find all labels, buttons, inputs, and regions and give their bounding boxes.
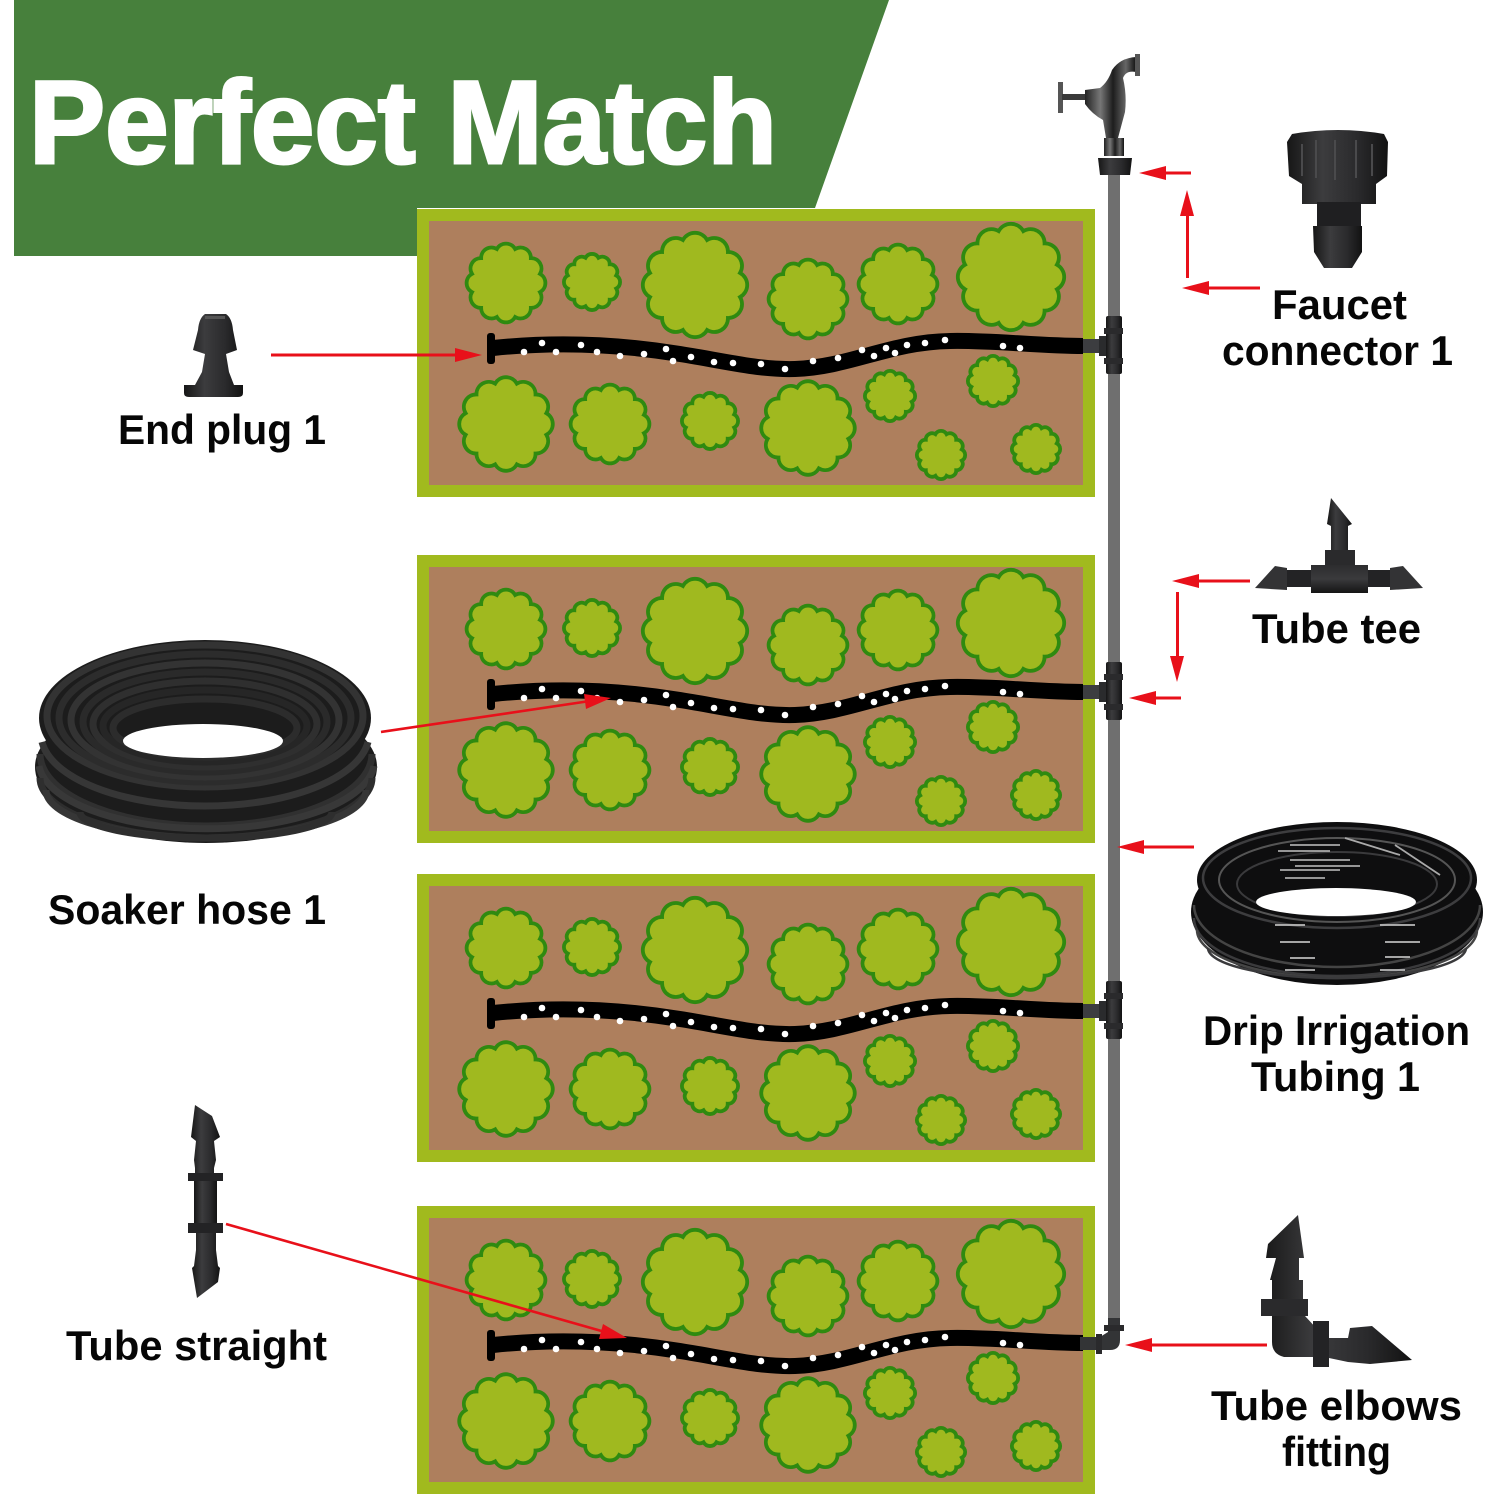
line 2: fitting bbox=[1282, 1428, 1391, 1475]
arrow segment 3 bbox=[1139, 166, 1191, 180]
label: drip irrigation tubing bbox=[1203, 1007, 1470, 1100]
label: faucet connector bbox=[1222, 281, 1453, 374]
tee connector 3 bbox=[1083, 981, 1123, 1039]
label: tube tee: Tube tee bbox=[1252, 605, 1421, 652]
shrubs bbox=[459, 224, 1064, 479]
arrow segment 3 bbox=[1129, 691, 1181, 705]
label: end plug: End plug 1 bbox=[118, 406, 326, 453]
arrow: tube straight to bed bbox=[226, 1224, 627, 1339]
icon: tube elbow bbox=[1261, 1215, 1412, 1367]
icon: tube straight bbox=[188, 1105, 223, 1298]
label: tube straight: Tube straight bbox=[66, 1322, 327, 1369]
arrows: tube tee bbox=[1129, 574, 1250, 705]
banner background bbox=[14, 0, 889, 256]
icon: drip irrigation tubing coil bbox=[1191, 822, 1483, 985]
bed frame bbox=[423, 215, 1089, 491]
soaker hose line bbox=[487, 679, 1083, 718]
vertical tube bbox=[1108, 172, 1120, 1322]
line 1: Tube elbows bbox=[1211, 1382, 1462, 1429]
elbow connector bbox=[1080, 1318, 1124, 1354]
icon: faucet bbox=[1058, 54, 1140, 175]
title text: Perfect Match bbox=[29, 57, 777, 189]
arrow: soaker hose to bed bbox=[381, 694, 611, 732]
arrow segment 1 bbox=[1182, 281, 1260, 295]
shrubs bbox=[459, 1221, 1064, 1476]
icon: faucet connector bbox=[1287, 130, 1388, 268]
arrow segment 2 bbox=[1180, 190, 1194, 278]
bed frame bbox=[423, 880, 1089, 1156]
tee connector 1 bbox=[1083, 316, 1123, 374]
icon: tube tee bbox=[1255, 498, 1423, 593]
icon: soaker hose coil bbox=[35, 640, 377, 843]
soaker hose line bbox=[487, 1330, 1083, 1369]
arrow segment 1 bbox=[1172, 574, 1250, 588]
icon: end plug bbox=[184, 314, 243, 397]
soaker hose line bbox=[487, 998, 1083, 1037]
line 2: connector 1 bbox=[1222, 327, 1453, 374]
tee connector 2 bbox=[1083, 662, 1123, 720]
line 1: Faucet bbox=[1272, 281, 1407, 328]
shrubs bbox=[459, 570, 1064, 825]
arrow: end plug to hose bbox=[271, 348, 482, 362]
arrow segment 2 bbox=[1170, 592, 1184, 682]
panel: garden bed 3 bbox=[423, 880, 1089, 1156]
line 1: Drip Irrigation bbox=[1203, 1007, 1470, 1054]
line 2: Tubing 1 bbox=[1251, 1053, 1420, 1100]
main supply pipe bbox=[1080, 172, 1124, 1354]
arrows: faucet connector bbox=[1139, 166, 1260, 295]
arrow: elbow to pipe bbox=[1125, 1338, 1267, 1352]
bed frame bbox=[423, 561, 1089, 837]
shrubs bbox=[459, 889, 1064, 1144]
title banner bbox=[14, 0, 889, 256]
panel: garden bed 4 bbox=[423, 1212, 1089, 1488]
label: tube elbows fitting bbox=[1211, 1382, 1462, 1475]
panel: garden bed 2 bbox=[423, 561, 1089, 837]
soaker hose line bbox=[487, 333, 1083, 372]
panel: garden bed 1 bbox=[423, 215, 1089, 491]
arrow: drip tubing to pipe bbox=[1117, 840, 1194, 854]
bed frame bbox=[423, 1212, 1089, 1488]
label: soaker hose: Soaker hose 1 bbox=[48, 886, 326, 933]
